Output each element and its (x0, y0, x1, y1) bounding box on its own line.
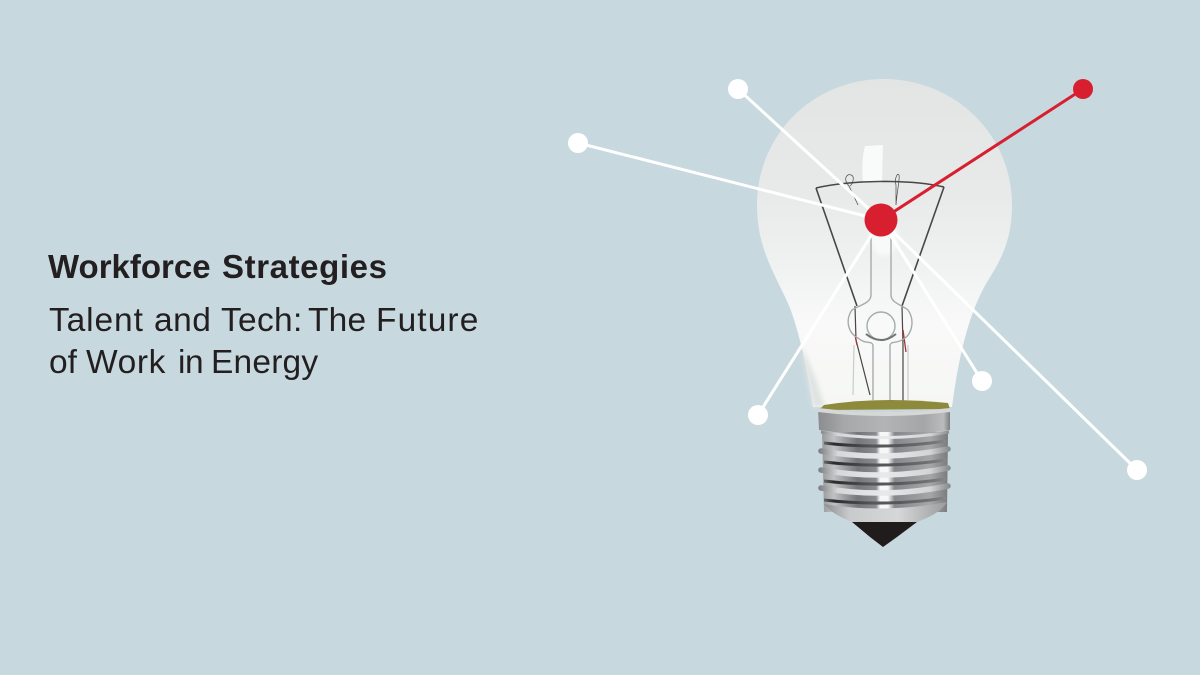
heading: Workforce (48, 248, 211, 285)
subtitle: and (154, 302, 211, 339)
glass stem (848, 235, 912, 400)
subtitle: Future (376, 302, 479, 339)
white connector lines (578, 89, 1137, 470)
contact tip (852, 522, 917, 547)
collar (818, 408, 950, 435)
subtitle: The (308, 302, 366, 339)
icon: light bulb (757, 79, 1012, 547)
subtitle: Energy (211, 344, 318, 381)
subtitle: of (49, 344, 78, 381)
subtitle: Tech: (221, 302, 303, 339)
white nodes (568, 79, 1147, 480)
olive glass seal (819, 400, 950, 410)
subtitle: Talent (49, 302, 144, 339)
filament wires (816, 174, 944, 405)
red node (1073, 79, 1093, 99)
subtitle: in (178, 344, 203, 381)
red connector line (881, 89, 1083, 220)
subtitle: Work (86, 344, 166, 381)
network diagram (568, 79, 1147, 480)
threads (822, 432, 948, 512)
metal cap (824, 502, 947, 522)
subtitle (49, 302, 479, 381)
red hub (864, 204, 898, 236)
heading: Strategies (222, 248, 388, 285)
screw base (818, 400, 950, 547)
bulb glass (757, 79, 1012, 407)
title block (48, 248, 479, 381)
